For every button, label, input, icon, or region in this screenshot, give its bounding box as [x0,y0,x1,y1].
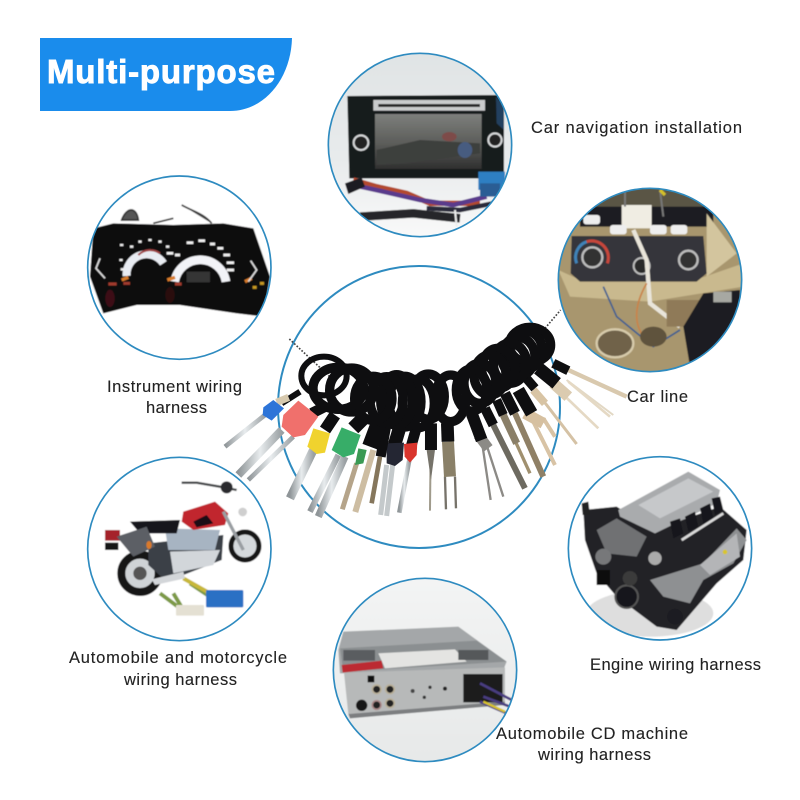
tool 4 [310,376,392,517]
label: CD machine [496,725,688,764]
panel: central tool circle [278,266,560,548]
tool 2 [238,367,364,480]
tool 7 [381,376,421,516]
tools: terminal removal pin set [225,310,627,517]
chain [289,310,561,381]
tool 12 [464,363,525,488]
panel: motorcycle photo [86,456,272,642]
tool 18 [509,327,627,415]
tool 11 [456,369,503,500]
label: automobile and motorcycle: Automobile and motorcycle [69,649,287,667]
tool 9 [412,374,444,511]
tool 17 [508,331,610,428]
label: automobile and motorcycle: wiring harness [123,671,237,689]
tool 8 [399,379,434,513]
label: instrument wiring: harness [146,399,207,417]
label: car line: Car line [627,388,688,406]
tool 3 [290,368,374,498]
panel: car navigation photo [328,52,512,238]
title banner: Multi-purpose [47,53,275,90]
panel: instrument cluster photo [86,175,272,360]
title banner [40,38,292,111]
tool 6 [372,375,413,503]
tool 14 [482,348,543,477]
label: engine wiring: Engine wiring harness [590,656,761,674]
label: instrument wiring [107,378,242,417]
panel: CD machine photo [332,578,518,762]
panel: car line dashboard photo [558,188,742,372]
label: CD machine: wiring harness [537,746,651,764]
label: instrument wiring: Instrument wiring [107,378,242,396]
panel: engine photo [568,456,752,641]
tool 15 [493,343,555,465]
tool 1 [225,357,347,447]
tool 16 [502,337,577,444]
label: automobile and motorcycle [69,649,287,689]
tool 5 [342,377,403,512]
tool 13 [474,355,530,473]
label: CD machine: Automobile CD machine [496,725,688,743]
label: car navigation: Car navigation installation [531,119,742,137]
tool 10 [435,375,466,509]
